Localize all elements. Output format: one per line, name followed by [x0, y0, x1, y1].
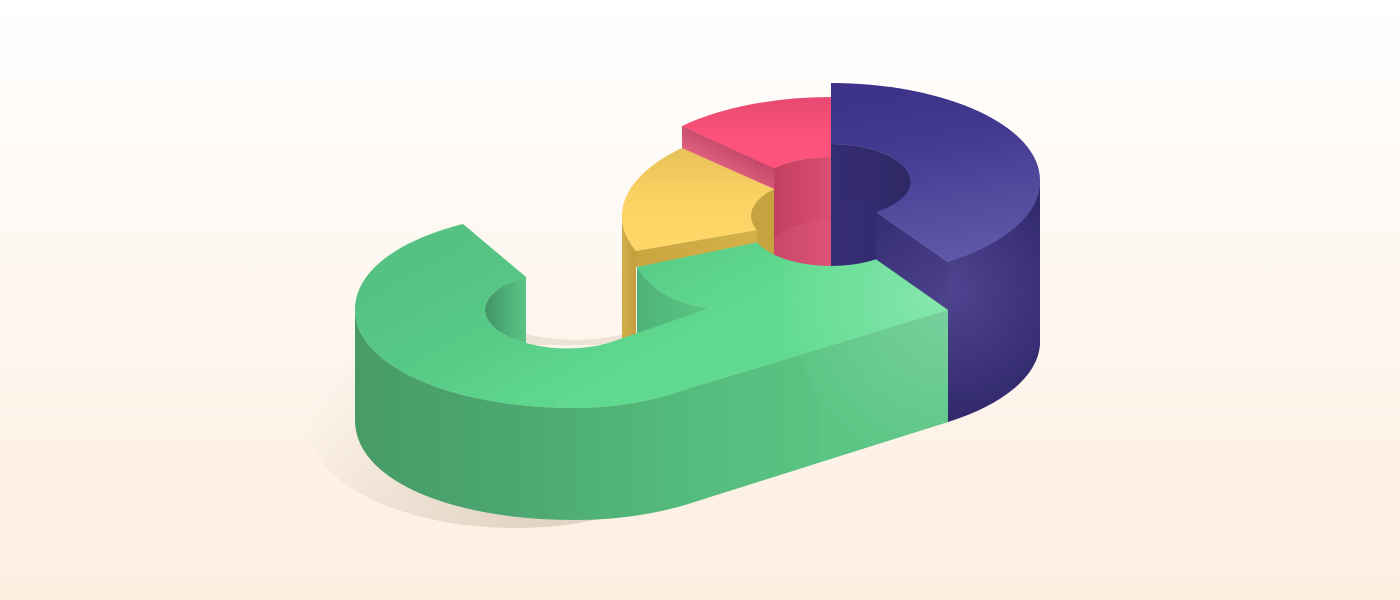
blue cut wall — [876, 212, 948, 311]
yellow top face — [622, 148, 790, 251]
ground shadow — [334, 384, 704, 528]
yellow outer side — [622, 216, 636, 340]
inner shadow under the gap — [526, 334, 625, 345]
segment: yellow — [622, 148, 790, 340]
green hole wall — [485, 277, 526, 343]
yellow step wall — [636, 230, 775, 267]
green front highlight — [797, 310, 948, 462]
segment: pink — [682, 97, 831, 270]
pink side wall — [682, 126, 774, 189]
green top face — [355, 224, 948, 408]
segment: green — [355, 224, 948, 520]
yellow inner hole wall — [751, 189, 774, 260]
green top highlight — [783, 258, 948, 360]
segment: blue — [831, 83, 1040, 422]
pink inner hole wall — [774, 157, 831, 270]
blue hole lower tone — [831, 198, 876, 270]
green notch wall — [637, 267, 710, 335]
pink lower highlight — [774, 219, 831, 270]
pink top face — [682, 97, 831, 168]
blue top face — [831, 83, 1040, 262]
blue outer side — [948, 180, 1040, 422]
blue hole wall — [831, 144, 911, 270]
green front wall — [355, 310, 948, 520]
